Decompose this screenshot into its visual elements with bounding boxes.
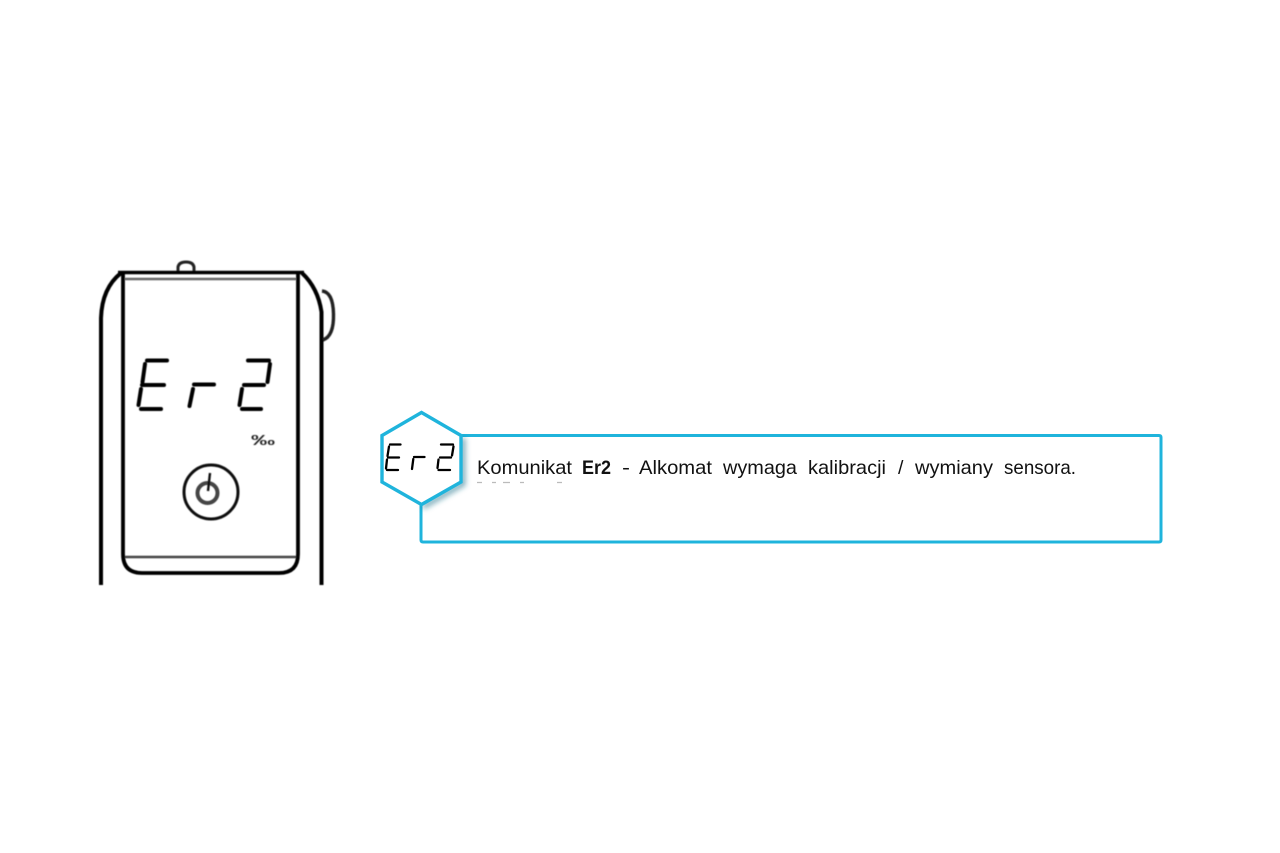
callout message: Komunikat [477, 457, 573, 479]
callout [382, 412, 1161, 542]
callout message: Alkomat [639, 457, 713, 479]
hexagon shadow [423, 438, 463, 507]
hexagon badge [382, 412, 461, 504]
badge reading Er2 [386, 444, 454, 470]
callout message: sensora. [1004, 457, 1076, 479]
callout box [421, 436, 1161, 542]
power button [184, 465, 238, 519]
display reading Er2 [138, 360, 270, 409]
callout message: wymiany [914, 457, 993, 479]
top nub [178, 262, 194, 271]
side button [322, 291, 334, 340]
device illustration [101, 262, 334, 585]
callout message: kalibracji [808, 457, 886, 479]
callout message: / [898, 457, 904, 479]
faint residue marks under text [477, 482, 562, 484]
device body outline [101, 272, 322, 585]
callout message: Er2 [582, 457, 611, 479]
callout message: - [622, 457, 630, 479]
callout message: wymaga [722, 457, 797, 479]
per mille symbol: ‰ [251, 432, 275, 449]
